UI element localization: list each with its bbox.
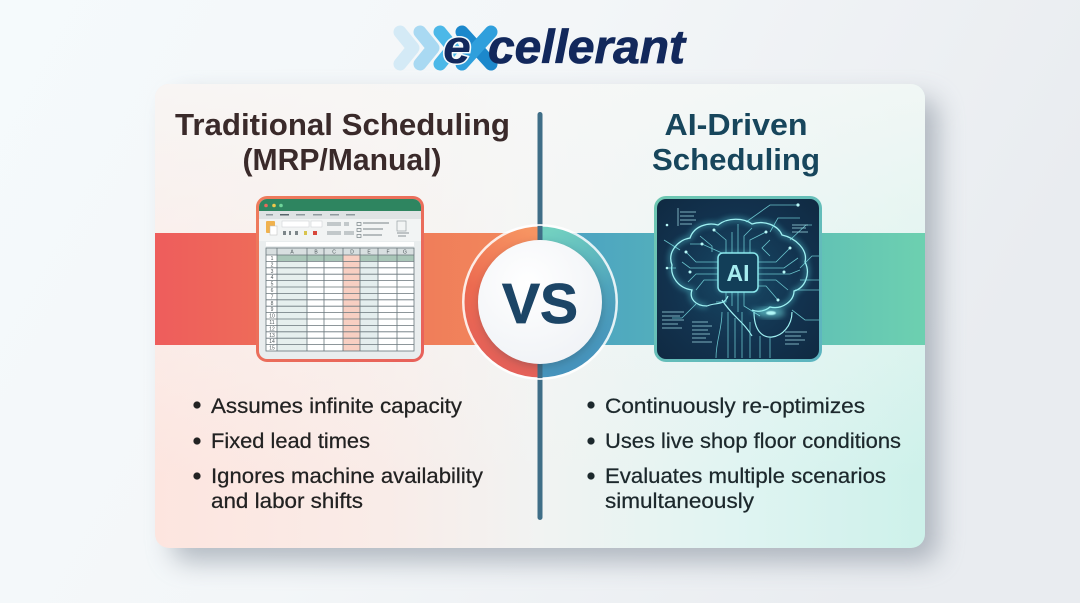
list: AI capabilities: simultaneously bbox=[605, 490, 755, 513]
spreadsheet grid: 8 bbox=[271, 301, 274, 307]
spreadsheet grid: 13 bbox=[269, 333, 275, 339]
heading: traditional scheduling: Traditional Scheduling bbox=[175, 107, 510, 142]
spreadsheet grid: 14 bbox=[269, 339, 275, 345]
logo: excellerant bbox=[400, 20, 687, 73]
small data text lines bbox=[662, 208, 808, 344]
list: traditional limitations bbox=[194, 395, 484, 513]
spreadsheet grid bbox=[266, 248, 414, 352]
brain nodes bbox=[666, 203, 800, 302]
spreadsheet grid: C bbox=[332, 250, 336, 256]
spreadsheet grid: 6 bbox=[271, 288, 274, 294]
list: traditional limitations: Assumes infinite capacity bbox=[211, 395, 463, 418]
spreadsheet grid: 9 bbox=[271, 307, 274, 313]
divider line bbox=[538, 112, 542, 520]
band: traditional red bbox=[155, 233, 540, 345]
list: traditional limitations: Fixed lead times bbox=[211, 430, 370, 453]
icon: spreadsheet window bbox=[256, 196, 424, 362]
card shadow bbox=[172, 98, 938, 562]
heading: traditional scheduling: (MRP/Manual) bbox=[242, 142, 442, 177]
heading: AI-driven scheduling: Scheduling bbox=[652, 142, 820, 177]
spreadsheet grid: 2 bbox=[271, 262, 274, 268]
spreadsheet grid: 3 bbox=[271, 269, 274, 275]
spreadsheet grid: E bbox=[367, 250, 371, 256]
icon: logo chevrons bbox=[400, 32, 453, 64]
spreadsheet grid: 5 bbox=[271, 282, 274, 288]
spreadsheet grid: 15 bbox=[269, 346, 275, 352]
AI chip bbox=[718, 253, 758, 292]
spreadsheet grid: 10 bbox=[269, 314, 275, 320]
list: AI capabilities: Uses live shop floor conditions bbox=[605, 430, 901, 453]
list: traditional limitations: Ignores machine availability bbox=[211, 465, 484, 488]
heading: traditional scheduling bbox=[175, 107, 510, 177]
spreadsheet grid: 4 bbox=[271, 275, 274, 281]
heading: AI-driven scheduling bbox=[652, 107, 820, 177]
spreadsheet grid: A bbox=[290, 250, 294, 256]
VS label: VS bbox=[502, 272, 578, 336]
logo wordmark: cellerant bbox=[488, 20, 687, 73]
band: AI teal bbox=[540, 233, 925, 345]
list: traditional limitations: and labor shifts bbox=[211, 490, 363, 513]
spreadsheet grid: 7 bbox=[271, 294, 274, 300]
spreadsheet grid: 1 bbox=[271, 256, 274, 262]
spreadsheet grid: D bbox=[350, 250, 354, 256]
AI chip label: AI bbox=[726, 260, 750, 286]
brain outline bbox=[671, 219, 807, 311]
spreadsheet grid: G bbox=[403, 250, 407, 256]
spreadsheet grid: F bbox=[386, 250, 390, 256]
list: AI capabilities: Continuously re-optimizes bbox=[605, 395, 865, 418]
icon: logo X bbox=[462, 32, 491, 64]
spreadsheet grid: 11 bbox=[269, 320, 275, 326]
VS badge bbox=[462, 224, 618, 380]
heading: AI-driven scheduling: AI-Driven bbox=[664, 107, 808, 142]
brain circuit traces bbox=[664, 205, 819, 358]
list: AI capabilities: Evaluates multiple scenarios bbox=[605, 465, 886, 488]
panel: card background bbox=[155, 84, 925, 548]
spreadsheet grid: B bbox=[314, 250, 318, 256]
list: AI capabilities bbox=[588, 395, 901, 513]
logo letter e: e bbox=[443, 20, 471, 73]
spreadsheet grid: 12 bbox=[269, 326, 275, 332]
icon: AI brain chip bbox=[654, 196, 822, 362]
brain outline glow bbox=[671, 219, 807, 311]
panel: comparison card bbox=[155, 84, 925, 548]
